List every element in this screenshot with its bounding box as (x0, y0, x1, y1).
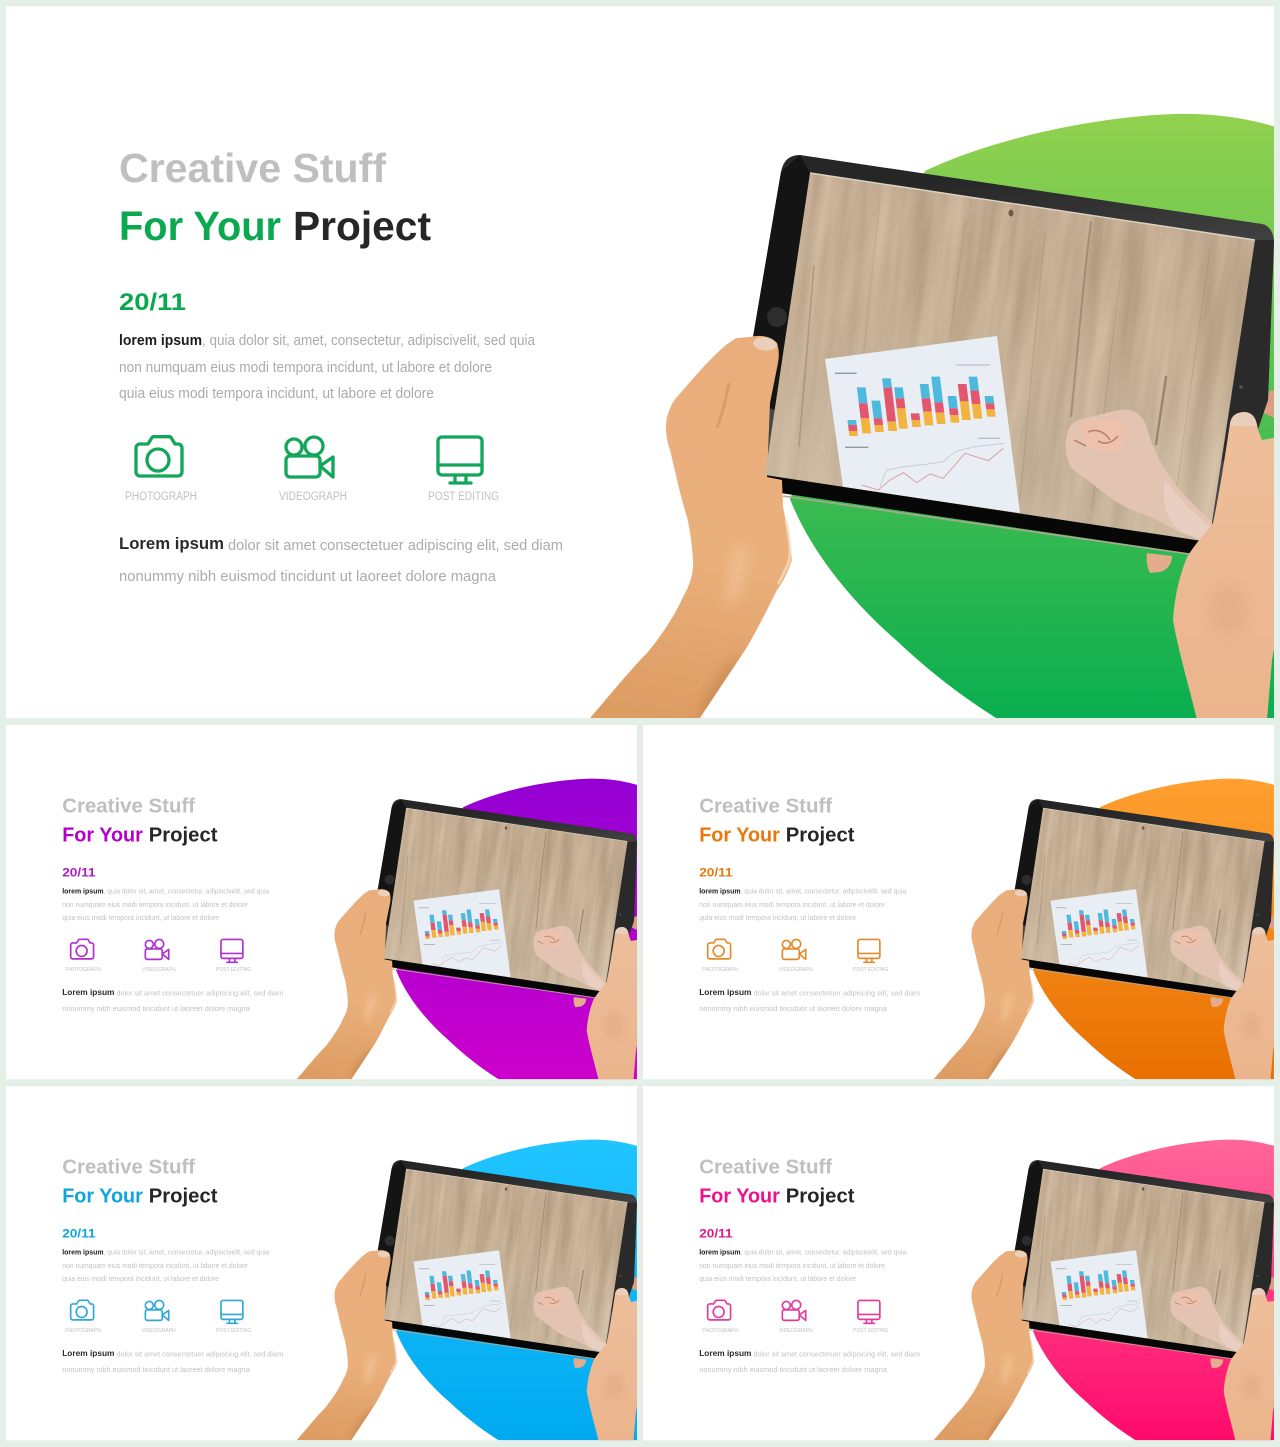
tablet held in two hands (934, 1160, 1274, 1440)
title: Project (786, 1185, 855, 1207)
icon labels: PHOTOGRAPH (125, 491, 197, 503)
icon labels (65, 1328, 252, 1334)
closing text: nonummy nibh euismod tincidunt ut laoreet dolore magna (699, 1365, 887, 1374)
closing text: dolor sit amet consectetuer adipiscing elit, sed diam (228, 538, 563, 554)
stacked bar chart on paper (842, 377, 998, 436)
title: Project (293, 203, 431, 249)
icon labels: VIDEOGRAPH (279, 491, 347, 503)
closing text: Lorem ipsum (119, 534, 224, 553)
title: Creative Stuff (62, 1157, 195, 1179)
body text: non numquam eius modi tempora incidunt, ut labore et dolore (699, 900, 885, 909)
closing text: Lorem ipsum (699, 987, 751, 997)
closing text: dolor sit amet consectetuer adipiscing elit, sed diam (116, 989, 283, 998)
date: 20/11 (62, 1226, 96, 1240)
body text: quia eius modi tempora incidunt, ut labore et dolore (119, 386, 434, 402)
closing text (62, 1348, 283, 1374)
service icons (708, 1300, 880, 1323)
closing text: nonummy nibh euismod tincidunt ut laoreet dolore magna (62, 1365, 250, 1374)
tablet held in two hands (296, 1160, 637, 1440)
finger under tablet (1147, 553, 1172, 573)
icon labels (125, 491, 499, 503)
body text: lorem ipsum (62, 1248, 104, 1257)
closing text: nonummy nibh euismod tincidunt ut laoreet dolore magna (699, 1004, 887, 1013)
closing text (119, 534, 563, 585)
title: For Your (119, 203, 281, 249)
title: Project (149, 1185, 218, 1207)
body text: lorem ipsum (699, 887, 741, 896)
title (699, 1157, 855, 1207)
body text: , quia dolor sit, amet, consectetur, adipiscivelit, sed quia (202, 333, 536, 349)
title: Creative Stuff (119, 145, 386, 191)
body text: non numquam eius modi tempora incidunt, ut labore et dolore (699, 1261, 885, 1270)
paper with charts (825, 336, 1020, 513)
purple blob background (396, 779, 638, 1079)
title (62, 1157, 218, 1207)
panel: orange slide (643, 725, 1280, 1084)
body text: quia eius modi tempora incidunt, ut labore et dolore (62, 913, 219, 922)
icon labels (702, 1328, 889, 1334)
body text (699, 1248, 906, 1283)
body text: lorem ipsum (62, 887, 104, 896)
finger behind tablet, right side (1262, 390, 1278, 420)
body text: non numquam eius modi tempora incidunt, ut labore et dolore (62, 900, 248, 909)
panel: blue slide (6, 1086, 660, 1445)
title (62, 796, 218, 846)
camera dot (1239, 385, 1243, 389)
body text: quia eius modi tempora incidunt, ut labore et dolore (62, 1274, 219, 1283)
icon: monitor (438, 437, 482, 483)
title: For Your (62, 824, 143, 846)
body text: , quia dolor sit, amet, consectetur, adipiscivelit, sed quia (741, 887, 906, 896)
title: Creative Stuff (699, 796, 832, 818)
service icons (71, 939, 243, 962)
body text (699, 887, 906, 922)
tablet screen: wood photo (700, 82, 1280, 618)
icon labels (65, 967, 252, 973)
service icons (71, 1300, 243, 1323)
body text (119, 333, 536, 402)
date: 20/11 (699, 865, 733, 879)
service icons (136, 437, 482, 483)
pink blob background (1033, 1140, 1275, 1440)
right hand (1173, 412, 1278, 720)
date: 20/11 (699, 1226, 733, 1240)
date: 20/11 (62, 865, 96, 879)
tablet body (733, 155, 1274, 557)
green blob background (790, 114, 1276, 718)
body text: non numquam eius modi tempora incidunt, ut labore et dolore (119, 360, 492, 376)
closing text: Lorem ipsum (699, 1348, 751, 1358)
icon labels (702, 967, 889, 973)
title: Project (149, 824, 218, 846)
body text (62, 887, 269, 922)
closing text (699, 987, 920, 1013)
left hand (590, 336, 792, 728)
body text: quia eius modi tempora incidunt, ut labore et dolore (699, 913, 856, 922)
tablet held in two hands (590, 82, 1280, 728)
closing text (62, 987, 283, 1013)
title: For Your (62, 1185, 143, 1207)
line chart on paper (835, 365, 1005, 490)
home button (767, 307, 787, 327)
date: 20/11 (119, 289, 186, 316)
icon: camera (136, 437, 182, 476)
icon: video camera (286, 437, 333, 477)
panel: pink slide (643, 1086, 1280, 1445)
title (699, 796, 855, 846)
blue blob background (396, 1140, 638, 1440)
service icons (708, 939, 880, 962)
body text (62, 1248, 269, 1283)
title: For Your (699, 1185, 780, 1207)
wood knot (1008, 210, 1014, 216)
closing text: dolor sit amet consectetuer adipiscing elit, sed diam (116, 1350, 283, 1359)
closing text: nonummy nibh euismod tincidunt ut laoreet dolore magna (119, 569, 497, 585)
closing text: nonummy nibh euismod tincidunt ut laoreet dolore magna (62, 1004, 250, 1013)
body text: , quia dolor sit, amet, consectetur, adipiscivelit, sed quia (104, 1248, 269, 1257)
closing text: dolor sit amet consectetuer adipiscing elit, sed diam (753, 989, 920, 998)
title: Creative Stuff (699, 1157, 832, 1179)
fist on desk (1066, 410, 1214, 545)
closing text: Lorem ipsum (62, 1348, 114, 1358)
body text: quia eius modi tempora incidunt, ut labore et dolore (699, 1274, 856, 1283)
body text: , quia dolor sit, amet, consectetur, adipiscivelit, sed quia (104, 887, 269, 896)
title: Creative Stuff (62, 796, 195, 818)
title: Project (786, 824, 855, 846)
body text: lorem ipsum (699, 1248, 741, 1257)
body text: non numquam eius modi tempora incidunt, ut labore et dolore (62, 1261, 248, 1270)
body text: , quia dolor sit, amet, consectetur, adipiscivelit, sed quia (741, 1248, 906, 1257)
tablet held in two hands (296, 799, 637, 1080)
closing text: dolor sit amet consectetuer adipiscing elit, sed diam (753, 1350, 920, 1359)
orange blob background (1033, 779, 1275, 1079)
icon labels: POST EDITING (428, 491, 499, 503)
title: For Your (699, 824, 780, 846)
tablet held in two hands (934, 799, 1274, 1080)
panel: purple slide (6, 725, 660, 1084)
closing text (699, 1348, 920, 1374)
panel: large green slide (6, 6, 1280, 728)
closing text: Lorem ipsum (62, 987, 114, 997)
body text: lorem ipsum (119, 333, 202, 349)
title (119, 145, 431, 249)
